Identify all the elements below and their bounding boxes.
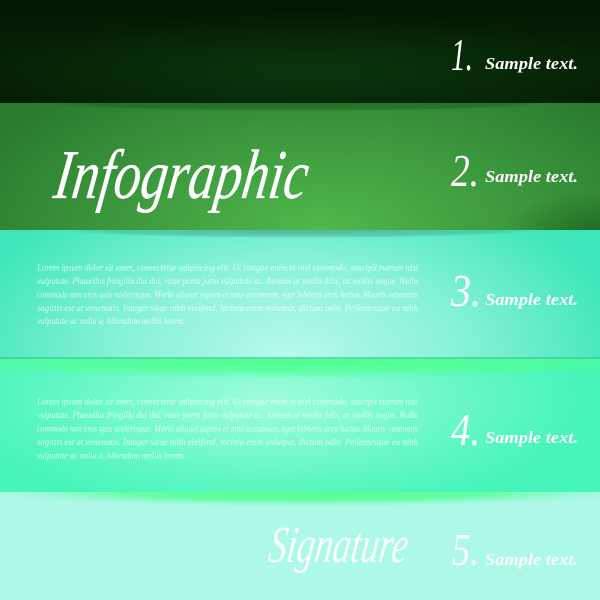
step 2 number: 2.	[451, 145, 479, 196]
paragraph text: sagittis est at venenatis. Integer vitae nibh eleifend, lacinia enim volutpat, dictum odio. Pellentesque eu nibh	[37, 437, 418, 448]
paragraph text: Lorem ipsum dolor sit amet, consectetur adipiscing elit. Ut congue enim et nisl commodo, suscipit rutrum nisi	[36, 264, 418, 274]
paragraph text: sagittis est at venenatis. Integer vitae nibh eleifend, lacinia enim volutpat, dictum odio. Pellentesque eu nibh	[37, 303, 418, 314]
step 1 label: Sample text.	[485, 54, 578, 73]
step 5 label: Sample text.	[485, 550, 578, 569]
panel: band 5 pale aqua	[0, 492, 600, 600]
step 4 label: Sample text.	[485, 428, 578, 447]
paragraph text: Lorem ipsum dolor sit amet, consectetur adipiscing elit. Ut congue enim et nisl commodo, suscipit rutrum nisi	[36, 398, 418, 408]
panel: band 2 green	[0, 103, 600, 230]
paragraph text: commodo non eros quis scelerisque. Morbi aliquet sapien et ante accumsan, eget lobortis arcu luctus. Mauris venenatis	[37, 290, 418, 300]
paragraph text: vulputate ac nulla a, bibendum mollis lorem.	[37, 317, 185, 327]
panel: band 1 dark green	[0, 0, 600, 103]
paragraph text: commodo non eros quis scelerisque. Morbi aliquet sapien et ante accumsan, eget lobortis arcu luctus. Mauris venenatis	[37, 424, 418, 434]
step 1 number: 1.	[451, 29, 473, 80]
step 3 number: 3.	[450, 265, 481, 316]
step 2 label: Sample text.	[485, 167, 578, 186]
step 5 number: 5.	[452, 524, 479, 575]
paragraph text	[36, 264, 418, 327]
signature: Signature	[265, 516, 412, 574]
title: Infographic	[49, 136, 314, 214]
panel: band 3 teal with paragraph	[0, 230, 600, 359]
paragraph text: vulputate. Phasellus fringilla dui dui, vitae porta justo vulputate ac. Aenean at mollis felis, ac mollis neque. Nulla	[37, 410, 418, 421]
paragraph text	[36, 398, 418, 462]
paragraph text: vulputate. Phasellus fringilla dui dui, vitae porta justo vulputate ac. Aenean at mollis felis, ac mollis neque. Nulla	[37, 276, 418, 287]
paragraph text: vulputate ac nulla a, bibendum mollis lorem.	[37, 452, 185, 462]
step 4 number: 4.	[451, 404, 480, 455]
step 3 label: Sample text.	[485, 290, 578, 309]
panel: band 4 mint with paragraph	[0, 359, 600, 492]
